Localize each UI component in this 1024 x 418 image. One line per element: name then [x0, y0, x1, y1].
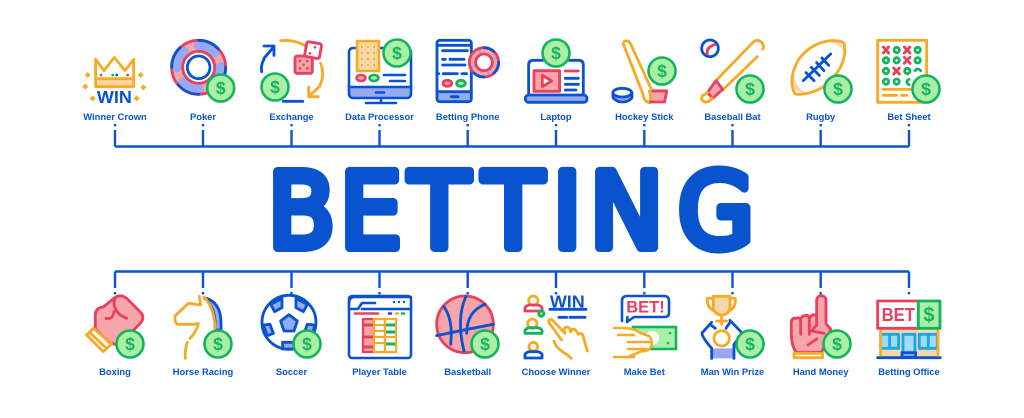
- label: Make Bet: Make Bet: [624, 366, 665, 377]
- item: Bet Sheet: [878, 40, 940, 122]
- icon: speech bubble, hand and banknote: BET!: [626, 298, 665, 316]
- icon: browser window with table: [349, 296, 411, 358]
- icon: tic-tac-toe bet sheet and coin: $: [921, 79, 931, 99]
- label: Poker: Poker: [190, 111, 216, 122]
- label: Betting Office: Betting Office: [878, 366, 940, 377]
- item: Exchange: [261, 40, 323, 122]
- icon: betting shop building: BET: [882, 304, 916, 325]
- icon: candidates, WIN and pointing hand: WIN: [550, 291, 585, 311]
- item: Laptop: [525, 40, 587, 122]
- item: Winner Crown: [82, 57, 147, 122]
- icon: hockey stick, puck and coin: $: [657, 61, 667, 81]
- icon: phone with poker chip: [437, 40, 499, 102]
- icon: baseball, bat and coin: $: [745, 79, 755, 99]
- item: Soccer: [262, 295, 320, 377]
- item: Make Bet: [614, 296, 676, 377]
- icon: desktop monitor with keypad and coin: $: [392, 43, 402, 63]
- icon: basketball and coin: $: [480, 334, 490, 354]
- item: Hand Money: [791, 296, 850, 377]
- icon: horse head and coin: $: [213, 334, 223, 354]
- label: Horse Racing: Horse Racing: [173, 366, 233, 377]
- item: Boxing: [87, 296, 144, 377]
- icon: boxing glove and coin: $: [125, 334, 135, 354]
- icon: foam finger and coin: $: [832, 334, 842, 354]
- icon: rugby ball and coin: $: [833, 79, 843, 99]
- item: Horse Racing: [173, 296, 233, 377]
- label: Hockey Stick: Hockey Stick: [615, 111, 674, 122]
- label: Boxing: Boxing: [99, 366, 131, 377]
- item: Data Processor: [345, 40, 414, 122]
- icon: crown with WIN: WIN: [97, 87, 132, 107]
- icon: laptop with video and coin: $: [551, 43, 561, 63]
- label: Baseball Bat: Baseball Bat: [704, 111, 761, 122]
- icon: betting shop building: [878, 301, 940, 358]
- item: Basketball: [437, 296, 498, 377]
- item: Baseball Bat: [702, 40, 764, 122]
- label: Winner Crown: Winner Crown: [83, 111, 147, 122]
- item: Rugby: [791, 41, 852, 122]
- label: Choose Winner: Choose Winner: [522, 366, 591, 377]
- top connector tree: [115, 124, 909, 146]
- label: Soccer: Soccer: [276, 366, 307, 377]
- label: Hand Money: Hand Money: [793, 366, 849, 377]
- icon: dice with exchange arrows and coin: $: [270, 77, 280, 97]
- icon: man raising trophy and coin: $: [745, 334, 755, 354]
- item: Hockey Stick: [613, 41, 676, 122]
- item: Poker: [172, 40, 234, 122]
- label: Man Win Prize: Man Win Prize: [701, 366, 764, 377]
- label: Rugby: Rugby: [806, 111, 836, 122]
- item: Betting Office: [878, 301, 940, 377]
- item: Man Win Prize: [701, 296, 764, 377]
- label: Laptop: Laptop: [540, 111, 572, 122]
- label: Basketball: Basketball: [444, 366, 491, 377]
- label: Exchange: Exchange: [269, 111, 314, 122]
- item: Betting Phone: [436, 40, 499, 122]
- item: Player Table: [349, 296, 411, 377]
- label: Betting Phone: Betting Phone: [436, 111, 499, 122]
- item: Choose Winner: [522, 291, 591, 377]
- title: BETTING: [268, 151, 754, 272]
- label: Bet Sheet: Bet Sheet: [887, 111, 931, 122]
- bottom connector tree: [115, 272, 909, 295]
- icon: poker chip with coin: $: [216, 78, 226, 98]
- icon: soccer ball and coin: $: [302, 334, 312, 354]
- label: Player Table: Player Table: [352, 366, 407, 377]
- icon: betting shop building: $: [923, 305, 935, 327]
- label: Data Processor: Data Processor: [345, 111, 414, 122]
